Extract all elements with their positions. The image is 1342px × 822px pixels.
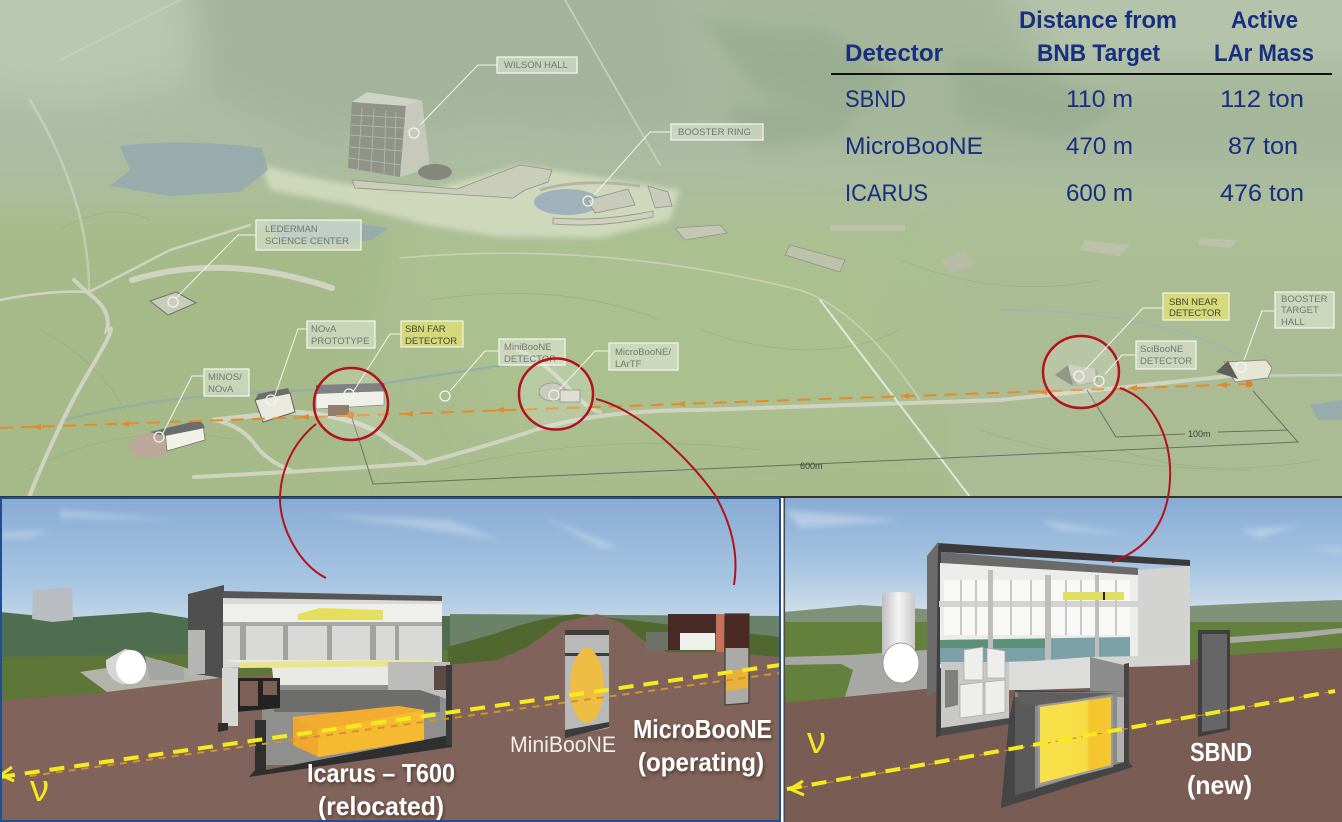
panel: Icarus, MiniBooNE and MicroBooNE cutaway <box>0 498 780 822</box>
row: SBND: SBND <box>845 86 906 113</box>
arrow: near detector callout curve <box>1112 388 1170 562</box>
tree line <box>784 600 1342 630</box>
pit walls <box>249 720 452 777</box>
label: MiniBooNE: MiniBooNE <box>510 732 616 757</box>
ground <box>0 614 780 822</box>
label: Icarus T600 relocated <box>307 758 455 821</box>
arrow: far detector callout curve <box>280 424 326 578</box>
label: SBN near detector: SBN NEAR <box>1169 297 1218 308</box>
red circle: SBN near detector <box>1043 336 1119 408</box>
row: SBND <box>846 90 1302 107</box>
label: Wilson Hall <box>409 57 577 138</box>
table header: Detector <box>845 40 943 67</box>
grass <box>784 622 1342 710</box>
label: Booster target hall: BOOSTER <box>1281 294 1328 305</box>
concrete and roads <box>784 650 936 697</box>
label: SBND new: SBND <box>1190 737 1252 767</box>
tanks and stair room <box>941 662 1009 732</box>
label: Booster target hall: HALL <box>1281 317 1305 328</box>
row: MicroBooNE: 87 ton <box>1228 133 1298 160</box>
row: SBND: 112 ton <box>1220 86 1304 113</box>
MINOS/NOvA <box>130 432 165 458</box>
label: Booster Ring <box>583 124 763 206</box>
contour lines <box>30 212 1320 470</box>
label: neutrino symbol: ν <box>30 768 49 810</box>
label: SciBooNE detector: SciBooNE <box>1140 344 1183 355</box>
detector table <box>831 7 1332 207</box>
hall interior <box>223 597 442 668</box>
campus light area <box>262 165 680 238</box>
label: MINOS/NOvA: NOvA <box>208 384 234 395</box>
table header: Active <box>1231 7 1298 34</box>
service shaft <box>1198 630 1230 737</box>
red circle: SBN far detector <box>314 368 388 440</box>
target hall <box>1224 360 1272 382</box>
label: Icarus T600 relocated: (relocated) <box>318 791 444 821</box>
row: ICARUS: ICARUS <box>845 180 928 207</box>
neutrino beam <box>787 691 1335 795</box>
label: SBN far detector: SBN FAR <box>405 324 446 335</box>
label: MicroBooNE LArTF: MicroBooNE/ <box>615 347 671 358</box>
label: SBN near detector <box>1074 293 1229 381</box>
T600 detector <box>293 706 424 757</box>
row: MicroBooNE: MicroBooNE <box>845 133 983 160</box>
SBND building <box>927 542 1190 808</box>
pit walls and interior <box>1001 663 1133 808</box>
LArTF <box>539 383 565 401</box>
row: MicroBooNE: 470 m <box>1066 133 1133 160</box>
roof <box>938 543 1190 566</box>
left wall <box>927 542 938 697</box>
MicroBooNE building and shaft <box>646 614 749 705</box>
buildings <box>130 92 1272 458</box>
label: Lederman Science Center: LEDERMAN <box>265 224 318 235</box>
label: SciBooNE detector: DETECTOR <box>1140 356 1192 367</box>
row: MicroBooNE <box>847 136 1296 154</box>
SBN far detector <box>316 391 384 409</box>
label: MicroBooNE LArTF <box>549 343 678 400</box>
ponds <box>110 142 1342 420</box>
grass <box>0 650 450 710</box>
label: neutrino symbol: ν <box>807 720 826 762</box>
MiniBooNE tank <box>565 630 609 738</box>
table header: BNB Target <box>1037 40 1160 67</box>
icon: vertical tank <box>882 592 919 683</box>
label: MINOS/NOvA <box>154 369 249 442</box>
outer side wall <box>188 585 224 678</box>
tree line <box>0 612 780 662</box>
roads <box>0 0 1342 497</box>
label: MicroBooNE operating: MicroBooNE <box>633 714 772 744</box>
Icarus T600 building <box>188 585 452 777</box>
label: NOvA prototype <box>266 321 375 405</box>
arrow: MicroBooNE callout curve <box>596 399 736 585</box>
Wilson Hall <box>348 93 412 177</box>
beam line <box>0 380 1252 430</box>
label: SBN far detector <box>344 321 463 399</box>
SBN near detector <box>1066 364 1098 386</box>
label: SBN far detector: DETECTOR <box>405 336 457 347</box>
label: Booster target hall: TARGET <box>1281 305 1319 316</box>
ground <box>784 648 1342 822</box>
Wilson Hall wing and booster buildings <box>352 165 552 198</box>
label: MINOS/NOvA: MINOS/ <box>208 372 242 383</box>
upper floor and concrete wall <box>1090 655 1190 667</box>
label: SBND new <box>1187 737 1252 800</box>
row: ICARUS: 600 m <box>1066 180 1133 207</box>
interior glazing <box>944 580 1130 635</box>
panel: aerial site map <box>0 0 1342 496</box>
label: 600m: 600m <box>800 461 823 471</box>
roof truss <box>223 591 442 601</box>
label: SBND new: (new) <box>1187 770 1252 800</box>
red circle: MicroBooNE <box>519 358 593 430</box>
label: MicroBooNE operating: (operating) <box>638 747 764 777</box>
label: SBN near detector: DETECTOR <box>1169 308 1221 319</box>
Wilson Hall distant <box>32 587 73 622</box>
label: MiniBooNE detector: DETECTOR <box>504 354 556 365</box>
NOvA prototype <box>255 393 295 422</box>
label: SciBooNE detector <box>1094 341 1196 386</box>
site distance lines <box>352 390 1298 484</box>
table header <box>831 7 1332 75</box>
label: MiniBooNE detector <box>440 339 565 401</box>
neutrino beam <box>0 665 780 781</box>
label: Lederman Science Center <box>168 220 361 307</box>
label: Booster target hall <box>1236 292 1334 372</box>
row: ICARUS: 476 ton <box>1220 180 1304 207</box>
hall <box>940 563 1138 668</box>
label: Booster Ring: BOOSTER RING <box>678 127 751 138</box>
label: MiniBooNE detector: MiniBooNE <box>504 342 552 353</box>
label: 100m: 100m <box>1188 429 1211 439</box>
label: Lederman Science Center: SCIENCE CENTER <box>265 236 349 247</box>
icon: storage tank <box>106 649 184 684</box>
label: MicroBooNE LArTF: LArTF <box>615 359 642 370</box>
label: NOvA prototype: NOvA <box>311 324 337 335</box>
row: SBND: 110 m <box>1066 86 1133 113</box>
label: MicroBooNE operating <box>633 714 772 777</box>
label: Wilson Hall: WILSON HALL <box>504 60 568 71</box>
table header: Distance from <box>1019 7 1177 34</box>
label: NOvA prototype: PROTOTYPE <box>311 336 369 347</box>
table header: LAr Mass <box>1214 40 1314 67</box>
Lederman center <box>150 292 196 315</box>
SBND detector <box>1038 695 1113 786</box>
row: ICARUS <box>847 184 1302 201</box>
label: Icarus T600 relocated: Icarus – T600 <box>307 758 455 788</box>
lower hall <box>262 665 450 765</box>
panel: SBND cutaway <box>784 498 1342 822</box>
